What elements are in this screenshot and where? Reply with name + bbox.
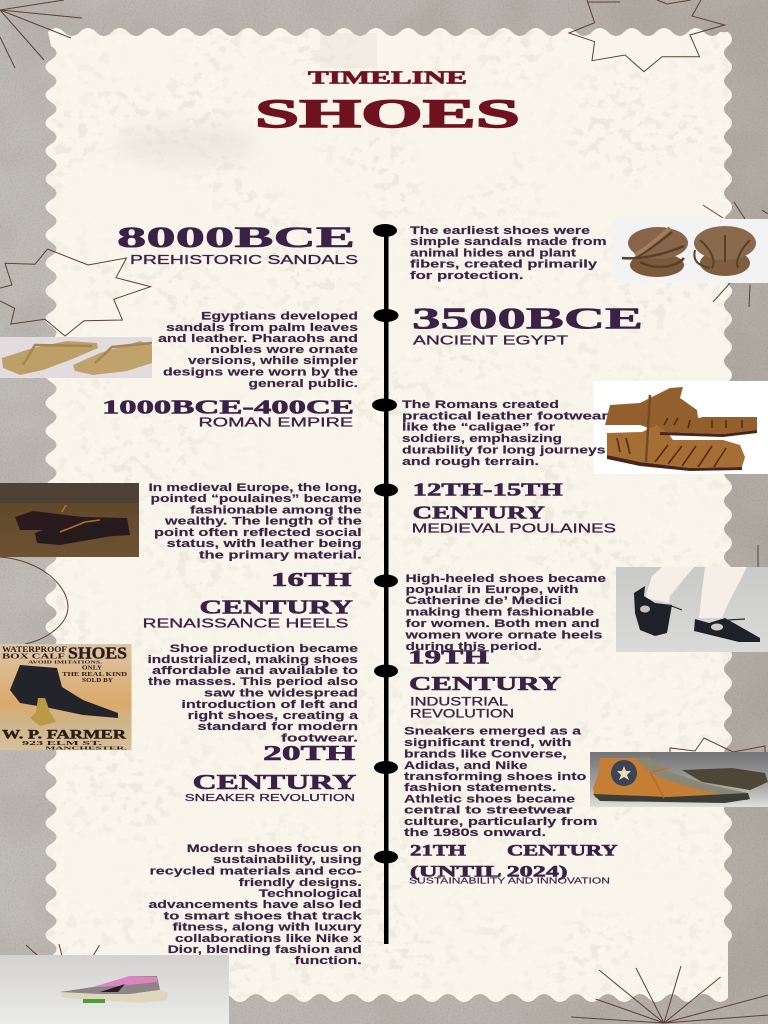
entry: 16th century text — [404, 573, 606, 653]
entry: 21st century heading — [409, 843, 618, 886]
entry: 19th century heading: REVOLUTION — [410, 707, 514, 721]
entry: 19th century text: the masses. This period also — [148, 676, 359, 688]
entry: 20th century text: brands like Converse, — [404, 748, 567, 760]
entry: 1000BCE-400CE text: soldiers, emphasizing — [402, 433, 562, 445]
entry: 16th century heading: 16TH — [271, 569, 352, 591]
entry: 1000BCE-400CE text: The Romans created — [402, 399, 559, 411]
decoration: left star — [0, 249, 150, 336]
photo: Renaissance heels — [616, 567, 768, 652]
entry: 3500BCE text: general public. — [248, 378, 358, 390]
entry: 19th century text: Shoe production became — [170, 643, 358, 655]
title — [255, 68, 520, 136]
entry: 21st century text: Technological — [259, 888, 362, 900]
decoration: right tick — [757, 545, 759, 567]
entry: 16th century text: women wore ornate heels — [404, 630, 602, 642]
entry: 19th century heading: CENTURY — [409, 673, 562, 695]
entry: 19th century heading: 19TH — [408, 646, 490, 668]
entry: 16th century text: Catherine de’ Medici — [406, 595, 562, 607]
entry: 19th century text: saw the widespread — [204, 688, 358, 700]
entry: 1000BCE-400CE heading — [102, 396, 354, 430]
entry: 3500BCE text: and leather. Pharaohs and — [158, 333, 358, 345]
entry: 3500BCE heading: ANCIENT EGYPT — [413, 334, 569, 348]
entry: 19th century heading: INDUSTRIAL — [410, 694, 508, 708]
timeline axis — [372, 224, 398, 944]
entry: 12th-15th century text: wealthy. The length of the — [164, 516, 362, 528]
entry: 20th century text: transforming shoes into — [404, 771, 587, 783]
entry: 1000BCE-400CE text — [402, 399, 609, 468]
entry: 16th century text: making them fashionable — [406, 606, 594, 618]
entry: 8000BCE heading: 8000BCE — [117, 221, 355, 254]
photo: W. P. Farmer shoe poster: BOX CALF — [2, 652, 66, 660]
entry: 21st century text: collaborations like Nike x — [175, 933, 362, 945]
photo: modern running shoe — [0, 955, 229, 1024]
entry: 21st century heading: 21TH — [410, 843, 467, 860]
decoration: burst behind running shoe — [26, 944, 100, 956]
entry: 21st century text: fitness, along with luxury — [172, 922, 362, 934]
entry: 19th century text: standard for modern — [198, 721, 358, 733]
photo: Roman caligae — [594, 381, 768, 474]
entry: 3500BCE text: versions, while simpler — [188, 355, 359, 367]
photo: W. P. Farmer shoe poster — [0, 644, 132, 750]
entry: 3500BCE heading: 3500BCE — [412, 300, 643, 335]
photo: Egyptian sandals — [0, 337, 152, 378]
photo: W. P. Farmer shoe poster: W. P. FARMER — [2, 727, 127, 741]
entry: 20th century text: Athletic shoes became — [404, 794, 575, 806]
entry: 16th century text: for women. Both men and — [406, 618, 600, 630]
decoration: left arc — [0, 557, 68, 644]
entry: 8000BCE text — [410, 225, 606, 282]
entry: 20th century heading — [185, 741, 356, 804]
entry: 3500BCE text: sandals from palm leaves — [166, 322, 358, 334]
entry: 21st century text: recycled materials and eco- — [150, 866, 362, 878]
entry: 21st century text: advancements have also led — [148, 899, 362, 911]
entry: 16th century text: popular in Europe, with — [406, 584, 578, 596]
entry: 19th century text: affordable and available to — [152, 665, 359, 677]
entry: 12th-15th century text: In medieval Europe, the long, — [148, 482, 362, 494]
entry: 21st century text: Modern shoes focus on — [187, 843, 362, 855]
entry: 20th century text: culture, particularly from — [404, 816, 598, 828]
entry: 20th century text: central to streetwear — [404, 804, 574, 816]
entry: 21st century text: Dior, blending fashion and — [168, 944, 362, 956]
entry: 8000BCE text: for protection. — [410, 270, 524, 282]
entry: 20th century text: fashion statements. — [404, 782, 556, 794]
entry: 3500BCE text — [158, 310, 359, 390]
decoration: right burst behind first photo — [703, 202, 768, 307]
entry: 12th-15th century text — [148, 482, 362, 562]
entry: 21st century text: sustainability, using — [213, 854, 362, 866]
photo: W. P. Farmer shoe poster: WATERPROOF — [2, 645, 67, 654]
entry: 8000BCE heading: PREHISTORIC SANDALS — [130, 253, 358, 267]
entry: 20th century text — [404, 726, 598, 839]
entry: 12th-15th century heading: MEDIEVAL POULAINES — [412, 522, 616, 536]
entry: 20th century heading: SNEAKER REVOLUTION — [185, 792, 355, 804]
entry: 12th-15th century heading — [412, 480, 616, 536]
entry: 1000BCE-400CE heading: 1000BCE-400CE — [102, 396, 354, 418]
entry: 1000BCE-400CE text: durability for long journeys — [402, 444, 606, 456]
entry: 8000BCE text: simple sandals made from — [410, 236, 606, 248]
entry: 8000BCE text: fibers, created primarily — [410, 258, 597, 270]
photo: W. P. Farmer shoe poster: ONLY — [82, 666, 103, 672]
entry: 3500BCE heading — [412, 300, 643, 348]
entry: 8000BCE text: The earliest shoes were — [410, 225, 590, 237]
entry: 19th century heading — [408, 646, 562, 721]
photo: W. P. Farmer shoe poster: 923 ELM ST. — [22, 740, 103, 747]
entry: 8000BCE text: animal hides and plant — [410, 248, 577, 260]
entry: 19th century text: industrialized, making shoes — [148, 654, 358, 666]
entry: 12th-15th century heading: 12TH-15TH — [413, 480, 563, 500]
entry: 21st century heading: (UNTIL 2024) — [410, 864, 568, 881]
entry: 19th century text — [148, 643, 359, 744]
photo: sneaker — [590, 752, 768, 807]
entry: 21st century text: to smart shoes that track — [164, 910, 363, 922]
photo: W. P. Farmer shoe poster: THE REAL KIND — [62, 671, 127, 678]
entry: 19th century text: introduction of left and — [181, 699, 358, 711]
decoration: top-right star — [569, 0, 724, 72]
entry: 3500BCE text: nobles wore ornate — [210, 344, 358, 356]
entry: 16th century text: High-heeled shoes became — [406, 573, 606, 585]
entry: 12th-15th century text: status, with leather being — [167, 538, 362, 550]
entry: 16th century heading — [143, 569, 354, 630]
entry: 12th-15th century text: fashionable among the — [190, 504, 362, 516]
entry: 20th century heading: CENTURY — [193, 770, 356, 794]
entry: 19th century text: right shoes, creating a — [188, 710, 359, 722]
entry: 20th century heading: 20TH — [263, 741, 355, 765]
entry: 20th century text: the 1980s onward. — [404, 827, 546, 839]
photo: W. P. Farmer shoe poster: SOLD BY — [82, 678, 114, 684]
entry: 1000BCE-400CE text: like the “caligae” for — [402, 422, 556, 434]
entry: 21st century text — [148, 843, 363, 967]
entry: 12th-15th century text: point often reflected social — [154, 527, 362, 539]
title: TIMELINE — [308, 68, 467, 88]
entry: 1000BCE-400CE text: practical leather footwear — [402, 410, 609, 422]
entry: 12th-15th century text: pointed “poulaines” became — [150, 493, 362, 505]
entry: 12th-15th century heading: CENTURY — [413, 502, 545, 522]
entry: 21st century text: function. — [295, 955, 362, 967]
entry: 12th-15th century text: the primary material. — [199, 550, 362, 562]
entry: 16th century heading: RENAISSANCE HEELS — [143, 616, 348, 630]
entry: 20th century text: significant trend, with — [404, 737, 572, 749]
entry: 8000BCE heading — [117, 221, 358, 267]
entry: 20th century text: Sneakers emerged as a — [404, 726, 582, 738]
entry: 21st century heading: SUSTAINABILITY AND INNOVATION — [409, 876, 610, 886]
entry: 16th century heading: CENTURY — [200, 596, 354, 618]
entry: 1000BCE-400CE text: and rough terrain. — [402, 456, 539, 468]
decoration: bottom-right burst — [571, 966, 768, 1023]
entry: 21st century text: friendly designs. — [239, 877, 362, 889]
entry: 19th century text: footwear. — [281, 732, 358, 744]
entry: 3500BCE text: Egyptians developed — [201, 310, 358, 322]
entry: 3500BCE text: designs were worn by the — [163, 366, 358, 378]
photo: prehistoric sandals — [613, 219, 768, 283]
photo: W. P. Farmer shoe poster: AVOID IMITATIONS. — [28, 660, 102, 664]
title: SHOES — [255, 91, 520, 136]
entry: 16th century text: during this period. — [406, 641, 542, 653]
photo: W. P. Farmer shoe poster: SHOES — [68, 644, 127, 662]
entry: 20th century text: Adidas, and Nike — [404, 760, 528, 772]
entry: 1000BCE-400CE heading: ROMAN EMPIRE — [198, 416, 353, 430]
photo: W. P. Farmer shoe poster: MANCHESTER. — [45, 746, 127, 750]
entry: 21st century heading: CENTURY — [507, 843, 618, 860]
decoration: star behind sneaker — [670, 738, 765, 752]
decoration: top-left burst — [0, 0, 82, 68]
photo: medieval poulaines — [0, 483, 139, 557]
